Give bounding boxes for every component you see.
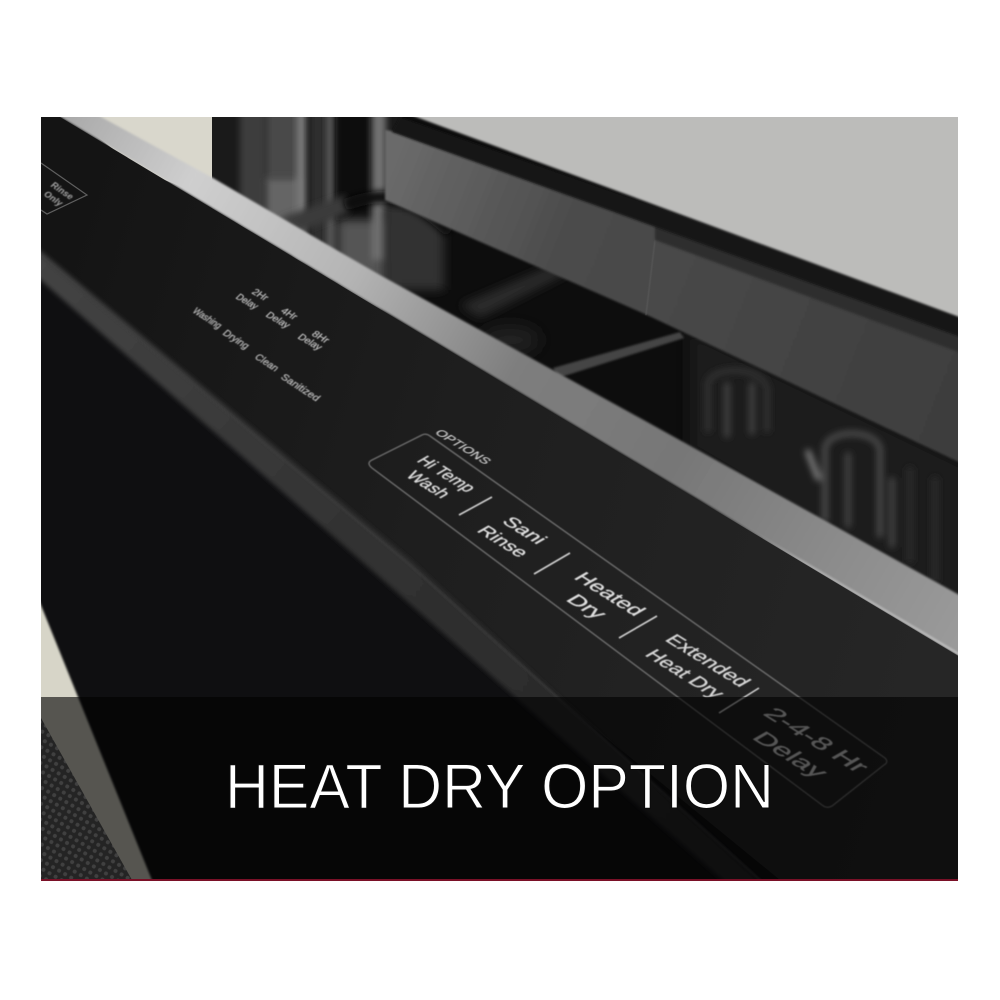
delay label: Delay: [233, 292, 261, 312]
cream wall top left: [98, 117, 212, 185]
delay label: Delay: [747, 728, 835, 782]
delay label: Delay: [295, 332, 324, 353]
title: HEAT DRY OPTION: [225, 752, 774, 822]
option: Sani Rinse: [476, 516, 549, 558]
right interior haze: [690, 339, 958, 594]
status: 2Hr Delay: [235, 288, 269, 310]
status: 8Hr Delay: 8Hr: [309, 329, 332, 346]
dark title band: [41, 697, 958, 880]
divider 4: [719, 688, 759, 713]
red baseline rule: [41, 879, 958, 881]
lower rack crossbar: [553, 332, 684, 378]
status: 4Hr Delay: [265, 308, 298, 329]
status: Clean: Clean: [252, 352, 282, 374]
options heading: OPTIONS: [431, 428, 495, 466]
heat dry label: Heat Dry: [640, 647, 730, 702]
delay label: Delay: [263, 310, 292, 331]
status: Sanitized: Sanitized: [278, 372, 323, 404]
status: Drying: Drying: [220, 328, 252, 352]
chrome trim strip: [60, 117, 958, 656]
option: Extended Heat Dry: [640, 632, 755, 702]
band upper shaded strip: [654, 227, 958, 352]
wash label: Wash: [402, 468, 455, 501]
dry label: Dry: [561, 592, 611, 622]
option: Extended Heat Dry: Extended: [660, 632, 755, 690]
photo background: [41, 117, 958, 879]
divider 2: [534, 553, 570, 574]
chrome bright edge: [709, 506, 958, 656]
rinse label: Rinse: [473, 523, 534, 560]
options outline box: [369, 434, 887, 807]
divider 1: [459, 497, 492, 515]
door front below groove: [64, 383, 777, 879]
band seam: [646, 240, 655, 315]
dishwasher tub interior: [212, 100, 570, 354]
divider 3: [619, 616, 657, 638]
status: 2Hr Delay: 2Hr: [249, 287, 271, 303]
groove highlight: [41, 249, 753, 879]
inner door band: [385, 130, 980, 472]
glassware in rack: [708, 371, 935, 580]
option: 2-4-8 Hr Delay: [747, 704, 875, 782]
cream wall bottom left: [41, 601, 153, 879]
left rinse label second line: Only: [42, 189, 65, 208]
status: Washing: Washing: [190, 306, 225, 331]
dark gap under door: [392, 117, 980, 344]
status: 4Hr Delay: 4Hr: [278, 306, 300, 322]
mesh floor pattern: [41, 718, 132, 880]
rinse label: Rinse: [49, 180, 76, 201]
option: Hi Temp Wash: Hi Temp: [413, 453, 481, 495]
infographic photo scene: [41, 117, 958, 881]
light gray door: [412, 117, 958, 318]
option: 2-4-8 Hr Delay: 2-4-8 Hr: [758, 704, 875, 776]
option: Heated Dry: Heated: [569, 570, 650, 619]
door thin line: [449, 600, 558, 697]
status: 8Hr Delay: [297, 330, 330, 351]
left rinse box: [41, 163, 87, 214]
option: Sani Rinse: Sani: [498, 514, 552, 547]
black control panel: [58, 117, 958, 879]
